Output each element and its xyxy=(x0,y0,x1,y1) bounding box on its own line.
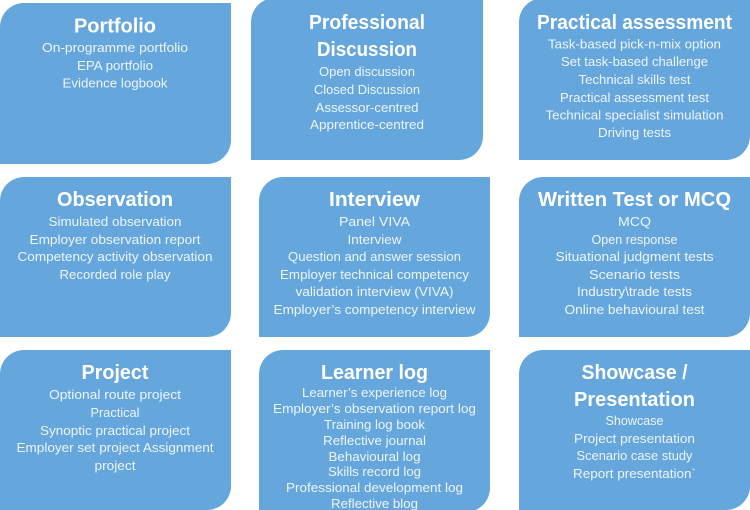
panel: Project xyxy=(0,350,231,510)
text block: Observation items: Simulated observation xyxy=(48,214,182,229)
text block: Professional Discussion items: Apprentice-centred xyxy=(310,117,424,132)
text block: Learner log items: Behavioural log xyxy=(328,449,420,464)
text block: Project items: project xyxy=(94,458,136,473)
panel: Learner log xyxy=(259,350,490,510)
text block: Practical assessment items xyxy=(546,36,724,140)
text block: Portfolio items: Evidence logbook xyxy=(62,76,168,90)
text block: Observation items xyxy=(18,214,212,282)
text block: Interview items: Question and answer session xyxy=(288,249,461,264)
text block: Professional Discussion items: Assessor-centred xyxy=(316,100,418,115)
text block: Portfolio items: EPA portfolio xyxy=(77,58,153,73)
panel: Showcase / Presentation xyxy=(519,350,750,510)
text block: Practical assessment items: Task-based pick-n-mix option xyxy=(548,36,721,52)
text block: Learner log items: Employer’s observation report log xyxy=(273,401,476,416)
text block: Showcase items: Project presentation xyxy=(574,431,695,446)
text block: Project items: Synoptic practical project xyxy=(40,423,190,438)
text block: Project items: Practical xyxy=(90,405,140,420)
text block: Project items: Optional route project xyxy=(49,387,181,402)
text block: Practical assessment items: Driving tests xyxy=(598,125,671,140)
text block: Interview items: validation interview (VIVA) xyxy=(296,284,454,299)
panel: Professional Discussion xyxy=(251,0,483,160)
heading: Showcase / Presentation: Presentation xyxy=(574,389,695,411)
text block: Written Test items: Online behavioural test xyxy=(564,302,705,317)
text block: Written Test items: Industry\trade tests xyxy=(577,284,693,299)
heading: Practical assessment: Practical assessment xyxy=(537,12,732,34)
text block: Practical assessment items: Set task-based challenge xyxy=(561,54,708,69)
panel: Written Test or MCQ xyxy=(519,177,750,337)
text block: Practical assessment items: Technical specialist simulation xyxy=(546,108,724,122)
text block: Interview items: Panel VIVA xyxy=(339,214,410,229)
heading: Showcase / Presentation: Showcase / xyxy=(582,362,688,384)
text block: Observation items: Recorded role play xyxy=(60,267,171,282)
panel: Observation xyxy=(0,177,231,337)
text block: Written Test items: Open response xyxy=(592,232,678,247)
panel: Portfolio xyxy=(0,3,231,164)
text block: Learner log items: Learner’s experience log xyxy=(302,385,447,400)
text block: Learner log items: Professional development log xyxy=(286,480,463,495)
heading: Portfolio: Portfolio xyxy=(74,16,156,38)
text block: Project items xyxy=(16,387,214,473)
text block: Interview items: Interview xyxy=(348,232,402,247)
heading: Showcase / Presentation xyxy=(574,362,695,411)
heading: Interview: Interview xyxy=(329,189,420,211)
heading: Professional Discussion xyxy=(309,12,425,61)
text block: Written Test items xyxy=(556,214,714,317)
heading: Written Test or MCQ: Written Test or MCQ xyxy=(538,189,731,211)
heading: Professional Discussion: Professional xyxy=(309,12,425,34)
text block: Interview items: Employer’s competency interview xyxy=(274,302,476,317)
text block: Written Test items: MCQ xyxy=(618,214,651,229)
text block: Learner log items: Skills record log xyxy=(328,464,421,479)
panel: Practical assessment xyxy=(519,0,750,160)
text block: Showcase items xyxy=(573,413,696,481)
text block: Showcase items: Report presentation` xyxy=(573,466,696,481)
text block: Showcase items: Showcase xyxy=(606,413,664,428)
text block: Learner log items: Reflective journal xyxy=(323,433,426,448)
heading: Professional Discussion: Discussion xyxy=(317,39,417,61)
text block: Showcase items: Scenario case study xyxy=(576,448,693,463)
heading: Project: Project xyxy=(82,362,149,384)
panel: Interview xyxy=(259,177,490,337)
text block: Observation items: Competency activity observation xyxy=(18,249,212,264)
text block: Interview items xyxy=(274,214,476,317)
text block: Practical assessment items: Practical assessment test xyxy=(560,90,709,105)
text block: Professional Discussion items: Open discussion xyxy=(319,64,415,79)
text block: Portfolio items: On-programme portfolio xyxy=(42,40,188,55)
text block: Written Test items: Situational judgment tests xyxy=(556,249,714,264)
text block: Learner log items: Training log book xyxy=(324,417,426,432)
heading: Observation: Observation xyxy=(57,189,173,211)
text block: Interview items: Employer technical competency xyxy=(280,267,470,282)
text block: Written Test items: Scenario tests xyxy=(589,267,681,282)
heading: Learner log: Learner log xyxy=(321,362,428,384)
text block: Observation items: Employer observation report xyxy=(30,232,201,247)
text block: Learner log items xyxy=(273,385,476,510)
text block: Practical assessment items: Technical skills test xyxy=(578,72,691,87)
text block: Professional Discussion items xyxy=(310,64,424,132)
text block: Portfolio items xyxy=(42,40,188,90)
text block: Project items: Employer set project Assignment xyxy=(16,440,214,455)
text block: Professional Discussion items: Closed Discussion xyxy=(314,82,420,97)
